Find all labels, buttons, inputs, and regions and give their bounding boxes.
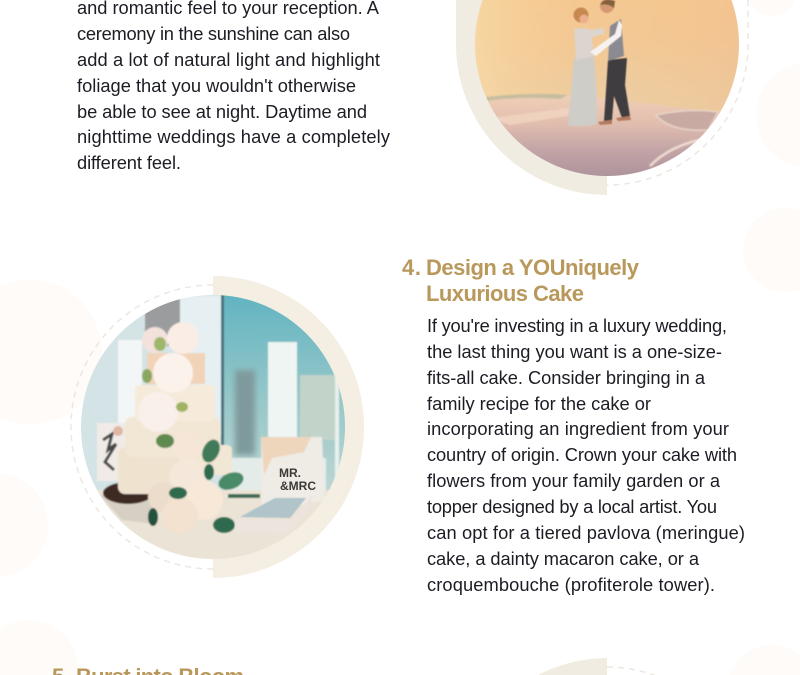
text block: daytime ceremony paragraph: add a lot of natural light and highlight <box>77 49 380 70</box>
sugar flowers <box>142 327 168 353</box>
cake tiers <box>118 447 180 494</box>
text block: daytime ceremony paragraph: be able to see at night. Daytime and <box>77 101 367 122</box>
text block: daytime ceremony paragraph: foliage that you wouldn't otherwise <box>77 75 356 96</box>
photo: tiered wedding cake with ring: MR. <box>279 466 301 480</box>
text block: daytime ceremony paragraph: different feel. <box>77 152 181 173</box>
text block: cake paragraph: country of origin. Crown your cake with <box>427 444 737 465</box>
cake board <box>101 495 152 523</box>
text block: cake paragraph: cake, a dainty macaron cake, or a <box>427 548 700 569</box>
photo: tiered wedding cake with ring <box>71 276 364 578</box>
heading: step 4: Design a YOUniquely <box>426 255 640 280</box>
leaves <box>154 337 166 351</box>
text block: cake paragraph: topper designed by a local artist. You <box>427 496 717 517</box>
text block: daytime ceremony paragraph: ceremony in the sunshine can also <box>77 23 350 44</box>
text block: cake paragraph: fits-all cake. Consider bringing in a <box>427 367 706 388</box>
text block: cake paragraph: can opt for a tiered pavlova (meringue) <box>427 522 745 543</box>
heading: step 4: Luxurious Cake <box>426 281 584 306</box>
text block: daytime ceremony paragraph: nighttime weddings have a completely <box>77 126 391 147</box>
text block: cake paragraph: flowers from your family garden or a <box>427 470 721 491</box>
text block: cake paragraph: croquembouche (profiterole tower). <box>427 574 715 595</box>
heading: step 4: 4. <box>402 255 421 280</box>
text block: daytime ceremony paragraph <box>77 0 391 173</box>
man <box>604 58 630 121</box>
left card <box>97 423 126 481</box>
text block: cake paragraph: family recipe for the cake or <box>427 393 651 414</box>
text block: cake paragraph: If you're investing in a luxury wedding, <box>427 315 727 336</box>
text block: cake paragraph <box>427 315 745 595</box>
photo: couple on the beach with ring <box>456 0 748 195</box>
text block: cake paragraph: the last thing you want is a one-size- <box>427 341 722 362</box>
photo: tiered wedding cake with ring: &MRC <box>280 479 316 493</box>
heading: step 4 <box>402 255 640 306</box>
text block: cake paragraph: incorporating an ingredient from your <box>427 418 729 439</box>
photo ring: step 5 cropped at page bottom <box>523 658 672 675</box>
woman <box>568 56 597 126</box>
right card and tray <box>261 437 325 512</box>
